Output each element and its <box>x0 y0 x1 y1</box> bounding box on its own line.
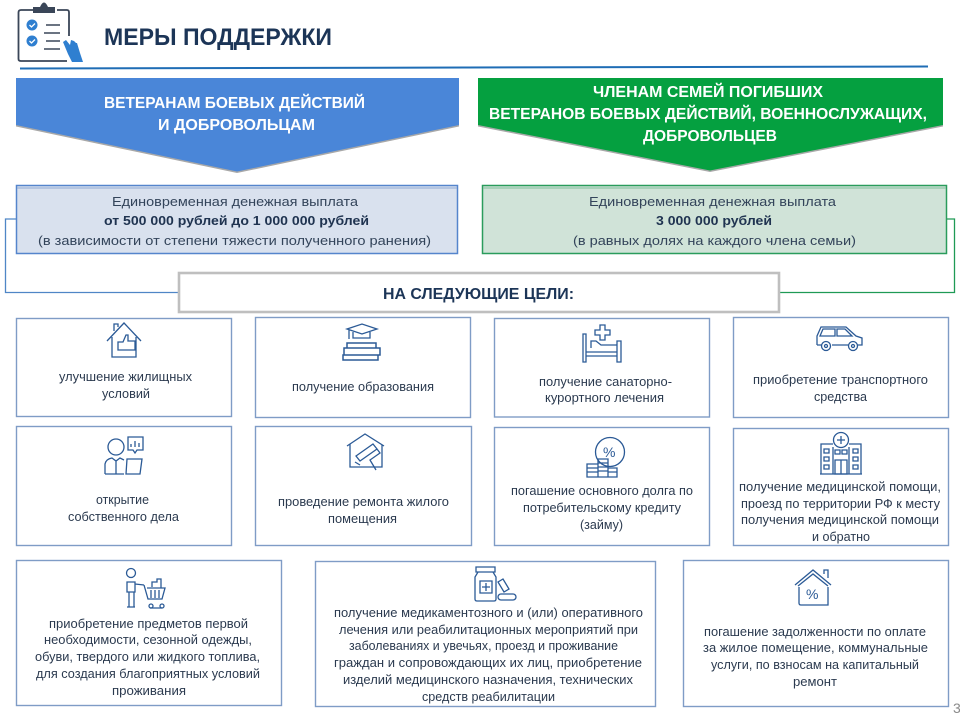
text: приобретение транспортного <box>753 373 928 387</box>
text: проживания <box>112 684 186 698</box>
text <box>59 370 193 401</box>
panel: veterans banner <box>16 78 459 173</box>
text: граждан и сопровождающих их лиц, приобретение <box>334 656 642 670</box>
card: renovation <box>256 426 472 546</box>
card: education <box>256 318 470 418</box>
icon: coins and percent <box>587 438 624 477</box>
text: за жилое помещение, коммунальные <box>703 641 928 655</box>
icon: clipboard checklist <box>18 2 83 62</box>
text: улучшение жилищных <box>59 370 193 384</box>
icon: house with percent: % <box>806 586 818 602</box>
card: loan <box>494 428 710 546</box>
icon: house with thumb <box>107 323 141 357</box>
text <box>35 617 260 698</box>
card: medical help <box>734 428 948 546</box>
icon: house with percent <box>795 570 831 605</box>
panel: families payment: Единовременная денежная выплата <box>589 194 837 209</box>
text <box>334 606 643 704</box>
text <box>278 495 449 526</box>
panel: veterans payment: (в зависимости от степени тяжести полученного ранения) <box>38 233 431 248</box>
icon: businessman <box>105 437 143 474</box>
icon: graduation cap and books <box>343 324 380 360</box>
text: изделий медицинского назначения, технических <box>343 673 634 687</box>
text: получение медицинской помощи, <box>739 480 941 494</box>
panel: veterans payment <box>16 186 458 254</box>
card: housing debt <box>684 560 948 706</box>
panel: veterans banner: И ДОБРОВОЛЬЦАМ <box>158 117 315 134</box>
panel: families payment <box>482 186 946 254</box>
icon: car <box>817 327 862 350</box>
text: проезд по территории РФ к месту <box>741 497 941 511</box>
text: приобретение предметов первой <box>49 617 248 631</box>
card: housing <box>16 318 232 416</box>
icon: coins and percent: % <box>603 444 615 460</box>
card: sanatorium <box>494 318 710 417</box>
icon: hospital <box>820 432 862 474</box>
panel: veterans payment: от 500 000 рублей до 1 000 000 рублей <box>104 213 369 228</box>
text: погашение основного долга по <box>511 484 693 498</box>
text: необходимости, сезонной одежды, <box>44 633 252 647</box>
text: средства <box>814 390 867 404</box>
text: лечения или реабилитационных мероприятий при <box>339 623 638 637</box>
text <box>703 625 928 689</box>
text <box>511 484 693 532</box>
panel: families banner: ЧЛЕНАМ СЕМЕЙ ПОГИБШИХ <box>593 82 823 101</box>
text: помещения <box>328 512 397 526</box>
card: vehicle <box>734 318 948 418</box>
heading: goals <box>179 273 779 312</box>
text: средств реабилитации <box>422 690 555 704</box>
text: проведение ремонта жилого <box>278 495 449 509</box>
card: essentials <box>16 560 282 706</box>
arrow: green connector <box>780 219 954 292</box>
text: услуги, по взносам на капитальный <box>711 658 919 672</box>
text <box>753 373 928 404</box>
panel: families banner: ВЕТЕРАНОВ БОЕВЫХ ДЕЙСТВИЙ, ВОЕННОСЛУЖАЩИХ, <box>489 104 927 123</box>
icon: shopper with cart <box>126 568 165 608</box>
heading: goals: НА СЛЕДУЮЩИЕ ЦЕЛИ: <box>383 286 574 303</box>
text: для создания благоприятных условий <box>36 667 260 681</box>
text: (займу) <box>580 518 623 532</box>
text <box>539 375 672 405</box>
icon: medicine bottle and pills <box>475 567 516 601</box>
panel: families banner <box>478 78 943 172</box>
text: получение образования <box>292 380 434 394</box>
text: условий <box>102 387 150 401</box>
text: заболеваниях и увечьях, проезд и проживание <box>349 639 618 653</box>
text: получения медицинской помощи <box>741 513 939 527</box>
text: и обратно <box>812 530 870 544</box>
text: получение медикаментозного и (или) оперативного <box>334 606 643 620</box>
text: собственного дела <box>68 510 179 524</box>
text: ремонт <box>793 675 837 689</box>
text <box>739 480 941 544</box>
panel: families payment: (в равных долях на каждого члена семьи) <box>573 233 856 248</box>
card: business <box>16 426 232 546</box>
icon: bed with cross <box>583 325 621 362</box>
text: обуви, твердого или жидкого топлива, <box>35 650 260 664</box>
text: курортного лечения <box>545 391 664 405</box>
card: treatment <box>316 562 656 706</box>
title: МЕРЫ ПОДДЕРЖКИ <box>104 24 332 51</box>
panel: families banner: ДОБРОВОЛЬЦЕВ <box>643 128 777 145</box>
panel: families payment: 3 000 000 рублей <box>656 213 772 228</box>
arrow: blue connector <box>6 219 178 292</box>
icon: house with roller <box>347 434 384 470</box>
panel: veterans banner: ВЕТЕРАНАМ БОЕВЫХ ДЕЙСТВИЙ <box>104 93 365 112</box>
text: потребительскому кредиту <box>523 501 682 515</box>
text <box>68 493 179 524</box>
panel: veterans payment: Единовременная денежная выплата <box>112 194 359 209</box>
text: получение санаторно- <box>539 375 672 389</box>
text: открытие <box>96 493 149 507</box>
text: погашение задолженности по оплате <box>704 625 926 639</box>
